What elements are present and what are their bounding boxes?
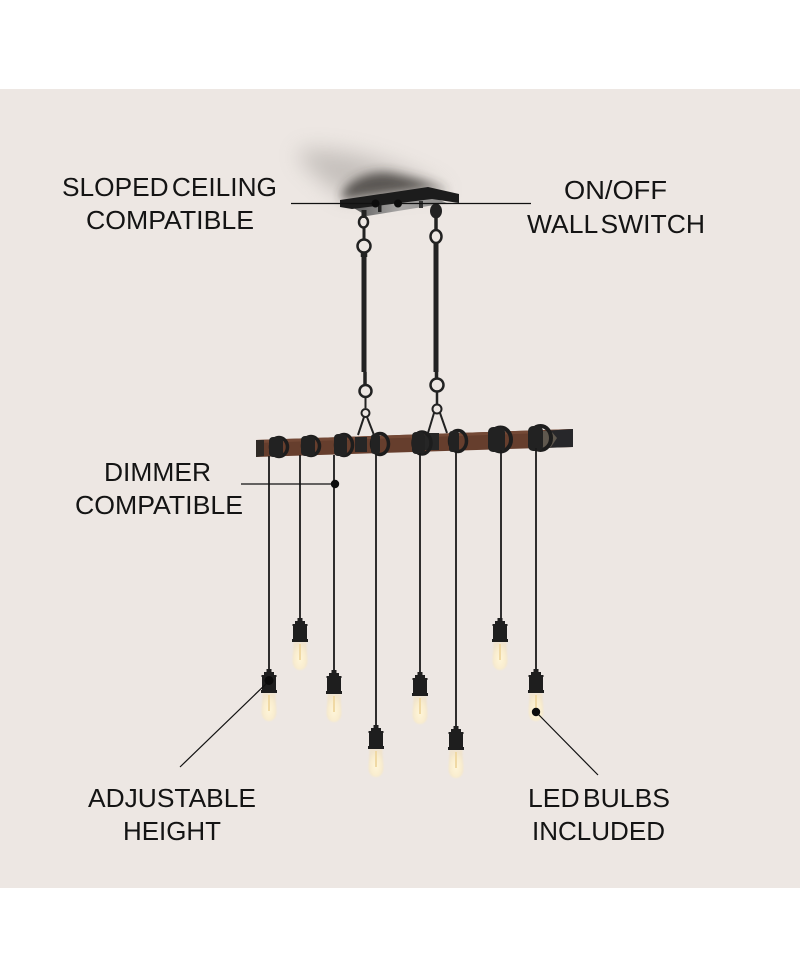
left suspension rod	[358, 210, 374, 435]
callout: led bulbs	[528, 708, 670, 846]
ring 7	[488, 427, 511, 452]
callout: led bulbs: LED BULBS	[528, 783, 670, 813]
callout: dimmer: DIMMER	[104, 457, 211, 487]
callout: adjustable height: ADJUSTABLE	[88, 783, 256, 813]
lamp 6	[448, 451, 464, 778]
ring 1	[269, 437, 288, 457]
ring 2	[301, 436, 320, 456]
ring 4	[371, 434, 388, 454]
beam rings	[269, 426, 551, 457]
wooden beam	[256, 429, 573, 457]
callout: sloped ceiling	[62, 172, 380, 235]
canopy plate	[340, 187, 459, 216]
right suspension rod	[428, 204, 447, 433]
ring 5	[412, 432, 431, 454]
ring 8	[528, 426, 551, 451]
lamp 5	[412, 453, 428, 724]
callout: wall switch	[394, 175, 705, 239]
lamp 8	[528, 448, 544, 721]
lamp 3	[326, 455, 342, 722]
lamp 7	[492, 450, 508, 670]
ring 6	[449, 430, 466, 452]
chandelier	[256, 150, 573, 778]
callout: dimmer: COMPATIBLE	[75, 490, 243, 520]
callout: adjustable height: HEIGHT	[123, 816, 221, 846]
pendant lamps	[261, 448, 544, 778]
callout: sloped ceiling: SLOPED CEILING	[62, 172, 277, 202]
callout: wall switch: ON/OFF	[564, 175, 667, 205]
callout: sloped ceiling: COMPATIBLE	[86, 205, 254, 235]
callout: adjustable height	[88, 676, 274, 846]
callout: dimmer	[75, 457, 339, 520]
callout: led bulbs: INCLUDED	[532, 816, 665, 846]
lamp 4	[368, 454, 384, 777]
ceiling shadow	[299, 150, 450, 200]
lamp 1	[261, 456, 277, 721]
callout: wall switch: WALL SWITCH	[527, 209, 705, 239]
lamp 2	[292, 455, 308, 670]
ring 3	[334, 434, 352, 456]
